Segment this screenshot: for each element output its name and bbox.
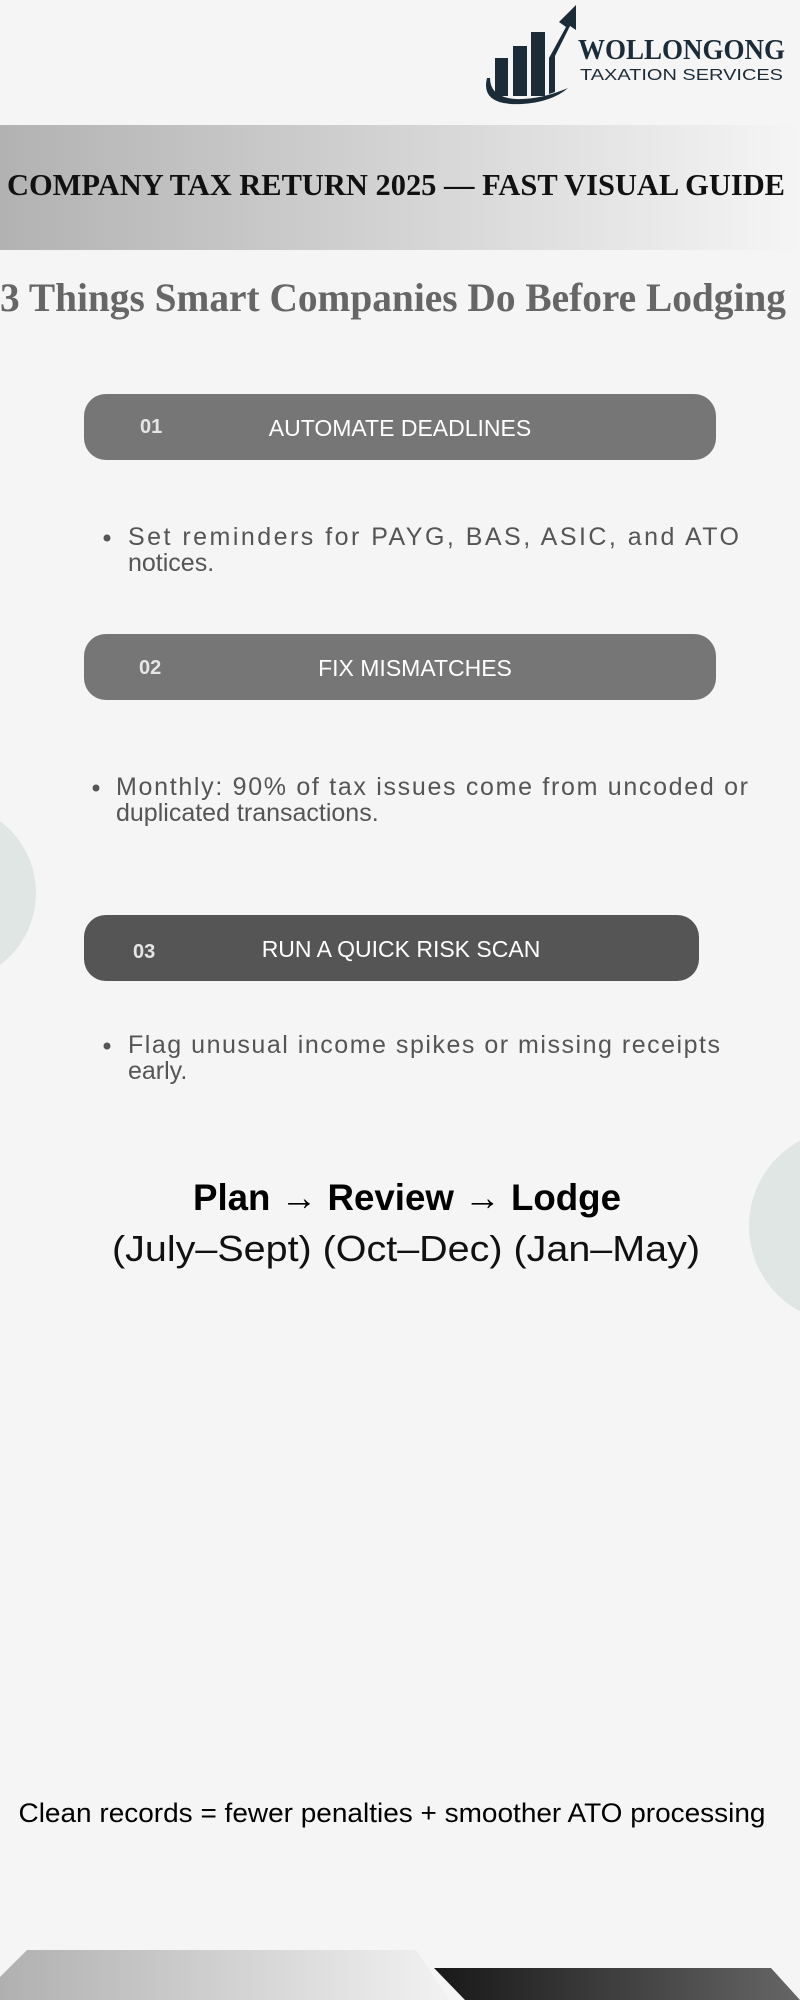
pill 2 — [84, 634, 716, 700]
bottom shape left — [0, 1950, 450, 2000]
pill 1: AUTOMATE DEADLINES — [269, 415, 531, 441]
pill 2: FIX MISMATCHES — [318, 655, 512, 681]
bullet 1: notices. — [128, 549, 214, 577]
header band — [0, 125, 800, 250]
pill 3: RUN A QUICK RISK SCAN — [262, 936, 540, 962]
pill 2: 02 — [139, 657, 161, 679]
subtitle: 3 Things Smart Companies Do Before Lodging — [0, 275, 786, 320]
pill 3 — [84, 915, 699, 981]
bottom shape right — [434, 1968, 800, 2000]
bullet 1: Set reminders for PAYG, BAS, ASIC, and ATO — [128, 523, 739, 551]
logo — [486, 5, 785, 104]
icon: rising bars with arrow — [486, 5, 576, 104]
footer note: Clean records = fewer penalties + smoother ATO processing — [18, 1798, 766, 1828]
bullet 2: duplicated transactions. — [116, 799, 379, 827]
logo text: WOLLONGONG — [578, 34, 785, 66]
bullet 2 — [92, 773, 748, 827]
pill 1: 01 — [140, 416, 162, 438]
logo: TAXATION SERVICES — [580, 67, 783, 84]
bullet 2: Monthly: 90% of tax issues come from uncoded or — [116, 773, 748, 801]
timeline heading: Plan → Review → Lodge — [193, 1177, 621, 1218]
pill 1 — [84, 394, 716, 460]
timeline periods: (July–Sept) (Oct–Dec) (Jan–May) — [112, 1228, 700, 1269]
bullet 3 — [104, 1031, 720, 1085]
bullet 1 — [104, 523, 739, 577]
decorative circle right — [749, 1129, 800, 1323]
pill 3: 03 — [133, 941, 155, 963]
bullet 3: early. — [128, 1057, 187, 1085]
decorative circle left — [0, 803, 36, 983]
bullet 3: Flag unusual income spikes or missing receipts — [128, 1031, 720, 1059]
title: COMPANY TAX RETURN 2025 — FAST VISUAL GUIDE — [7, 167, 785, 202]
